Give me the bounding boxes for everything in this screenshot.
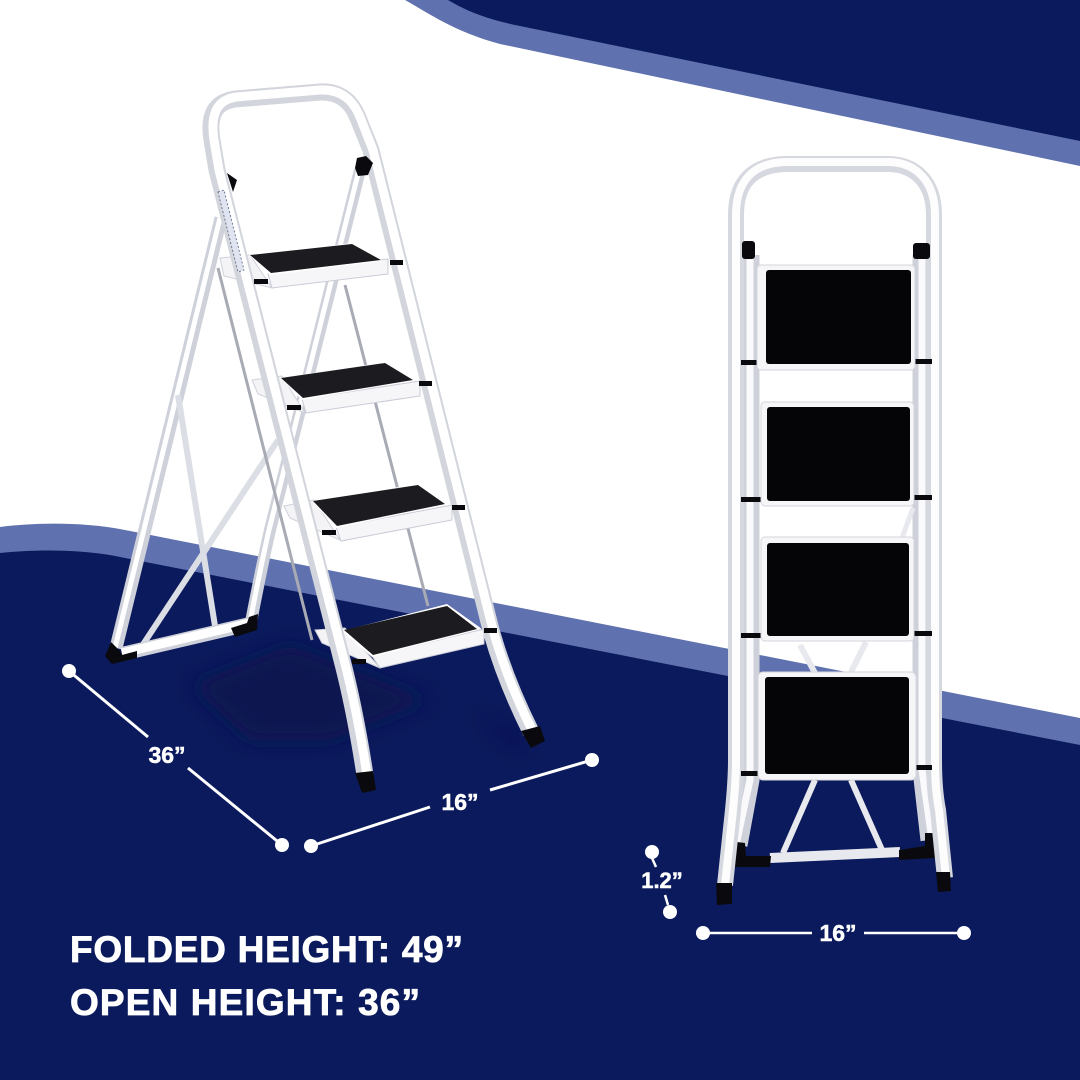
- bottom navy floor with band: [0, 524, 1080, 1080]
- dimension: depth 36 in: 36”: [148, 742, 186, 768]
- hinge blocks, pegs and feet: [227, 156, 545, 793]
- floor shadow of open ladder: [190, 645, 530, 745]
- dimension: width 16 in, open ladder: 16”: [441, 789, 479, 815]
- height specifications: FOLDED HEIGHT: 49”: [70, 929, 463, 970]
- rear legs and braces: [115, 170, 360, 654]
- dimension: width 16 in, folded ladder: [696, 920, 971, 946]
- height specifications: OPEN HEIGHT: 36”: [70, 982, 420, 1023]
- braces and rear bar: [770, 508, 913, 858]
- hinge blocks and feet: [716, 241, 951, 905]
- dimension: depth 36 in: [62, 664, 289, 852]
- front rails and top arch: [211, 90, 533, 775]
- rear bar brackets: [735, 833, 935, 867]
- step pegs: [741, 359, 932, 776]
- step treads: [249, 243, 484, 668]
- dimension: 1.2 in: 1.2”: [641, 868, 683, 893]
- outer frame and arch: [725, 162, 946, 885]
- steel rods: [218, 268, 428, 640]
- dimension: 1.2 in: [641, 845, 683, 919]
- dimension: width 16 in, folded ladder: 16”: [819, 920, 857, 946]
- inner rails: [736, 255, 932, 845]
- open ladder, side view: [105, 90, 545, 793]
- dimension: width 16 in, open ladder: [304, 753, 599, 853]
- top right colour band: [405, 0, 1080, 166]
- warning label on rail: [218, 190, 244, 272]
- folded ladder, front view: [716, 162, 951, 905]
- rear foot brackets: [105, 614, 258, 664]
- folded step panels: [757, 265, 916, 780]
- folded step supports: [220, 255, 380, 668]
- height specifications: [70, 929, 463, 1023]
